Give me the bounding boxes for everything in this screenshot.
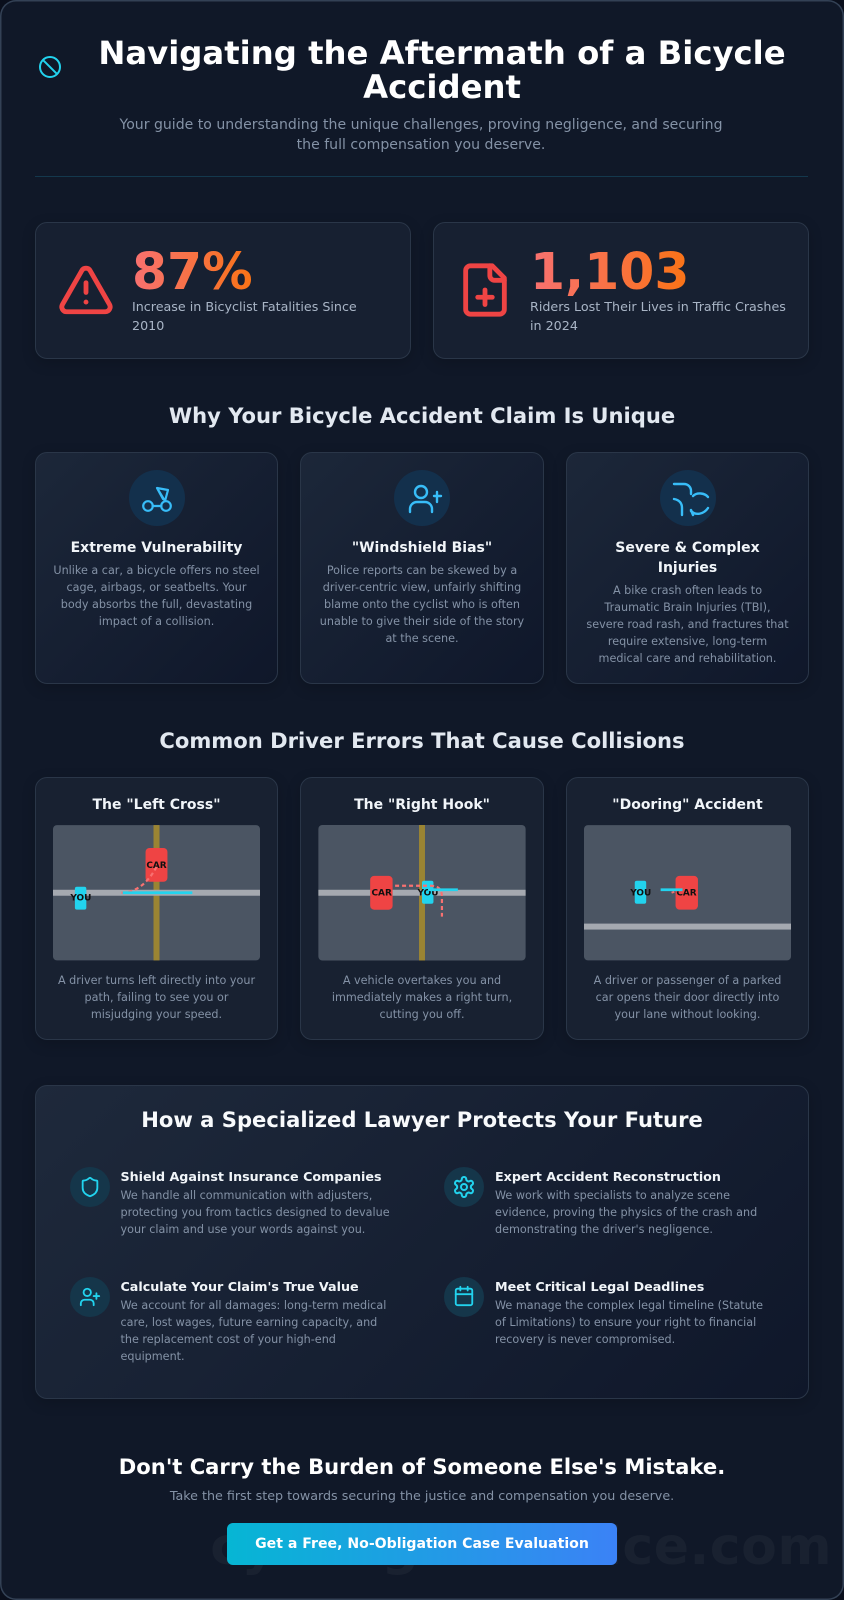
icon: ban [39, 56, 61, 78]
card text: require extensive, long-term [608, 635, 767, 648]
card text [58, 974, 256, 1021]
card text: path, failing to see you or [85, 991, 228, 1004]
panel heading: How a Specialized Lawyer Protects Your Future [141, 1106, 703, 1132]
title [98, 34, 786, 106]
card text: body absorbs the full, devastating [61, 598, 252, 611]
panel: extreme vulnerability [35, 452, 278, 684]
cta button: Get a Free, No-Obligation Case Evaluation [255, 1536, 589, 1552]
diagram: right hook: YOU [416, 889, 439, 899]
item title: Meet Critical Legal Deadlines [495, 1278, 704, 1294]
card text: medical care and rehabilitation. [599, 652, 776, 665]
title: Accident [363, 68, 521, 106]
icon: person plus [394, 470, 450, 526]
cta subtext: Take the first step towards securing the justice and compensation you deserve. [170, 1488, 674, 1502]
title: Navigating the Aftermath of a Bicycle [98, 34, 786, 72]
diagram: left cross: YOU [69, 894, 91, 904]
card title: "Windshield Bias" [352, 540, 492, 556]
item text: We manage the complex legal timeline (Statute [495, 1299, 763, 1312]
item text: recovery is never compromised. [495, 1333, 675, 1346]
subtitle [119, 116, 723, 152]
panel: left cross [35, 777, 278, 1040]
item: shield [70, 1167, 390, 1236]
card text: Police reports can be skewed by a [327, 564, 517, 577]
panel: windshield bias [300, 452, 544, 684]
card text [332, 974, 512, 1021]
item title: Calculate Your Claim's True Value [120, 1278, 359, 1294]
call to action [119, 1454, 725, 1565]
card title: Injuries [658, 560, 717, 576]
icon: gear [444, 1167, 484, 1207]
card text: blame onto the cyclist who is often [324, 598, 520, 611]
heading: driver errors: Common Driver Errors That Cause Collisions [159, 728, 685, 752]
diagram: right hook: CAR [371, 889, 392, 899]
item text: the replacement cost of your high-end [120, 1333, 336, 1346]
card text: Traumatic Brain Injuries (TBI), [604, 601, 771, 614]
stat label: 2010 [132, 318, 164, 333]
item text: We work with specialists to analyze scene [495, 1189, 730, 1202]
card title: The "Left Cross" [92, 796, 220, 812]
stat card: 87% [35, 222, 411, 359]
card text [53, 564, 260, 628]
cta button [227, 1523, 617, 1565]
card text [320, 564, 524, 645]
card text: A driver or passenger of a parked [594, 974, 781, 987]
card title: Extreme Vulnerability [71, 540, 242, 556]
item title: Expert Accident Reconstruction [495, 1168, 721, 1184]
diagram: left cross: CAR [146, 861, 167, 871]
card text: severe road rash, and fractures that [586, 618, 789, 631]
divider [35, 176, 808, 177]
cta heading: Don't Carry the Burden of Someone Else's Mistake. [119, 1454, 725, 1478]
icon: file plus [463, 263, 507, 317]
icon: warning triangle [59, 266, 113, 314]
icon: bicycle [128, 470, 184, 526]
stat number: 1,103 [530, 242, 689, 300]
card text: cutting you off. [379, 1008, 465, 1021]
panel: severe injuries [566, 452, 809, 684]
diagram: dooring: CAR [676, 889, 697, 899]
card text: impact of a collision. [99, 615, 214, 628]
item text: demonstrating the driver's negligence. [495, 1223, 713, 1236]
item: deadlines [444, 1277, 763, 1346]
card title: "Dooring" Accident [612, 796, 763, 812]
item text [120, 1299, 386, 1363]
item text [495, 1189, 757, 1236]
diagram: dooring [584, 825, 791, 960]
panel: right hook [300, 777, 544, 1040]
card text [586, 584, 789, 665]
card text: unable to give their side of the story [320, 615, 524, 628]
diagram: left cross [53, 825, 260, 960]
icon: injury curves [660, 470, 716, 526]
card title: Severe & Complex [615, 540, 760, 556]
item text [120, 1189, 390, 1236]
panel: dooring [566, 777, 809, 1040]
card text: car opens their door directly into [596, 991, 779, 1004]
stat label [132, 298, 357, 333]
item text: of Limitations) to ensure your right to financial [495, 1316, 756, 1329]
item text [495, 1299, 763, 1346]
panel: lawyer protections [35, 1085, 809, 1399]
item text: your claim and use your words against you. [120, 1223, 365, 1236]
subtitle: Your guide to understanding the unique challenges, proving negligence, and securing [119, 116, 723, 132]
item title: Shield Against Insurance Companies [120, 1168, 382, 1184]
card text: misjudging your speed. [91, 1008, 222, 1021]
card text: Unlike a car, a bicycle offers no steel [53, 564, 260, 577]
item text: care, lost wages, future earning capacity, and [120, 1316, 377, 1329]
card text: driver-centric view, unfairly shifting [323, 581, 521, 594]
watermark: cyclinglawoffice.com [210, 1517, 832, 1577]
icon: shield [70, 1167, 110, 1207]
item: reconstruction [444, 1167, 757, 1236]
icon: user plus [70, 1277, 110, 1317]
card title [615, 540, 760, 576]
item text: We handle all communication with adjusters, [120, 1189, 372, 1202]
subtitle: the full compensation you deserve. [297, 136, 545, 152]
item text: equipment. [120, 1350, 185, 1363]
card text [594, 974, 781, 1021]
header [35, 34, 808, 177]
stat label: Increase in Bicyclist Fatalities Since [132, 298, 357, 314]
card title: The "Right Hook" [354, 796, 490, 812]
card text: at the scene. [385, 632, 459, 645]
card text: A vehicle overtakes you and [343, 974, 501, 987]
card text: cage, airbags, or seatbelts. Your [67, 581, 246, 594]
stat card: 1,103 [433, 222, 809, 359]
icon: calendar [444, 1277, 484, 1317]
stat number: 87% [132, 242, 253, 300]
card text: your lane without looking. [615, 1008, 760, 1021]
item: true value [70, 1277, 386, 1363]
card text: immediately makes a right turn, [332, 991, 512, 1004]
heading: why unique: Why Your Bicycle Accident Claim Is Unique [169, 402, 675, 428]
stat label [530, 298, 786, 333]
card text: A bike crash often leads to [613, 584, 762, 597]
diagram: dooring: YOU [629, 889, 651, 899]
stat label: Riders Lost Their Lives in Traffic Crashes [530, 298, 786, 314]
diagram: right hook [318, 825, 526, 960]
item text: We account for all damages: long-term medical [120, 1299, 386, 1312]
item text: evidence, proving the physics of the crash and [495, 1206, 757, 1219]
stat label: in 2024 [530, 318, 578, 333]
card text: A driver turns left directly into your [58, 974, 255, 987]
item text: protecting you from tactics designed to devalue [120, 1206, 390, 1219]
